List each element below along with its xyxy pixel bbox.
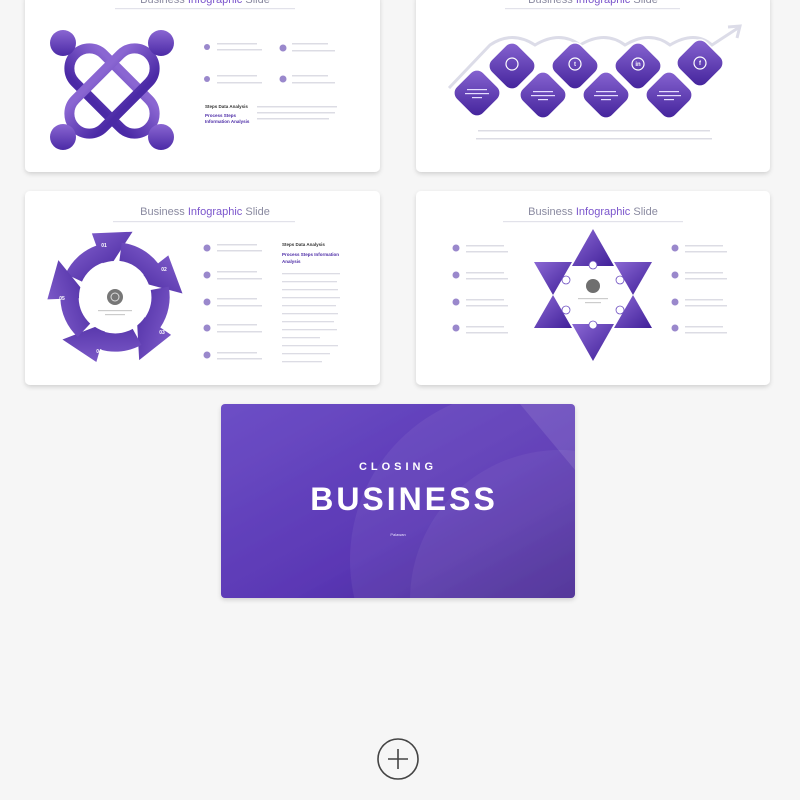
heading: closing label: CLOSING (359, 461, 437, 473)
heading: business: BUSINESS (310, 481, 498, 517)
icon: center check (586, 279, 600, 293)
heading: cycle slide title: Business Infographic Slide (140, 206, 270, 218)
labels: step numbers: 04 (96, 349, 102, 355)
text block: left list (452, 244, 508, 334)
chart: spiral arrows (38, 230, 193, 379)
panel: arrows cycle slide (25, 191, 380, 385)
text block: cycle list (204, 244, 210, 358)
panel: social diamonds slide: f (699, 61, 702, 67)
labels: step numbers: 05 (59, 296, 65, 302)
text block: cycle description: Steps Data Analysis (282, 242, 325, 247)
panel: closing slide (220, 404, 576, 602)
icons: knot corner circles (50, 30, 174, 150)
panel: knot slide (25, 0, 380, 172)
icons: social circles (506, 57, 706, 70)
labels: step numbers: 03 (159, 330, 165, 336)
text block: cycle description: Process Steps Information (282, 252, 339, 257)
chart: interlocking knot (61, 40, 163, 142)
icons: star gear nodes (562, 261, 624, 329)
heading: star slide title: Business Infographic Slide (528, 206, 658, 218)
panel: star slide (416, 191, 770, 385)
chart: center circle (79, 261, 151, 333)
labels: step numbers: 02 (161, 267, 167, 273)
icon: add slide button (378, 739, 418, 779)
text block: cycle description: Analysis (282, 259, 301, 264)
text block: description (476, 130, 712, 140)
arrow: growth line (449, 26, 740, 88)
text block: feature list: Steps Data Analysis (205, 104, 248, 109)
panel: social diamonds slide: t (574, 62, 576, 68)
text block: right list (672, 244, 727, 334)
chart: star of triangles (534, 229, 652, 361)
text block: cycle description (282, 242, 340, 362)
text block: feature list (204, 43, 337, 124)
labels: step numbers: 01 (101, 243, 107, 249)
labels: step numbers (59, 243, 167, 355)
chart: diamonds (450, 36, 727, 122)
panel: social diamonds slide: in (635, 62, 641, 68)
text block: diamond captions (465, 89, 681, 100)
text block: feature list: Information Analysis (205, 119, 250, 124)
text block: feature list: Process Steps (205, 113, 237, 118)
panel: social diamonds slide (416, 0, 770, 172)
text: presenter: Palawan (390, 532, 406, 537)
